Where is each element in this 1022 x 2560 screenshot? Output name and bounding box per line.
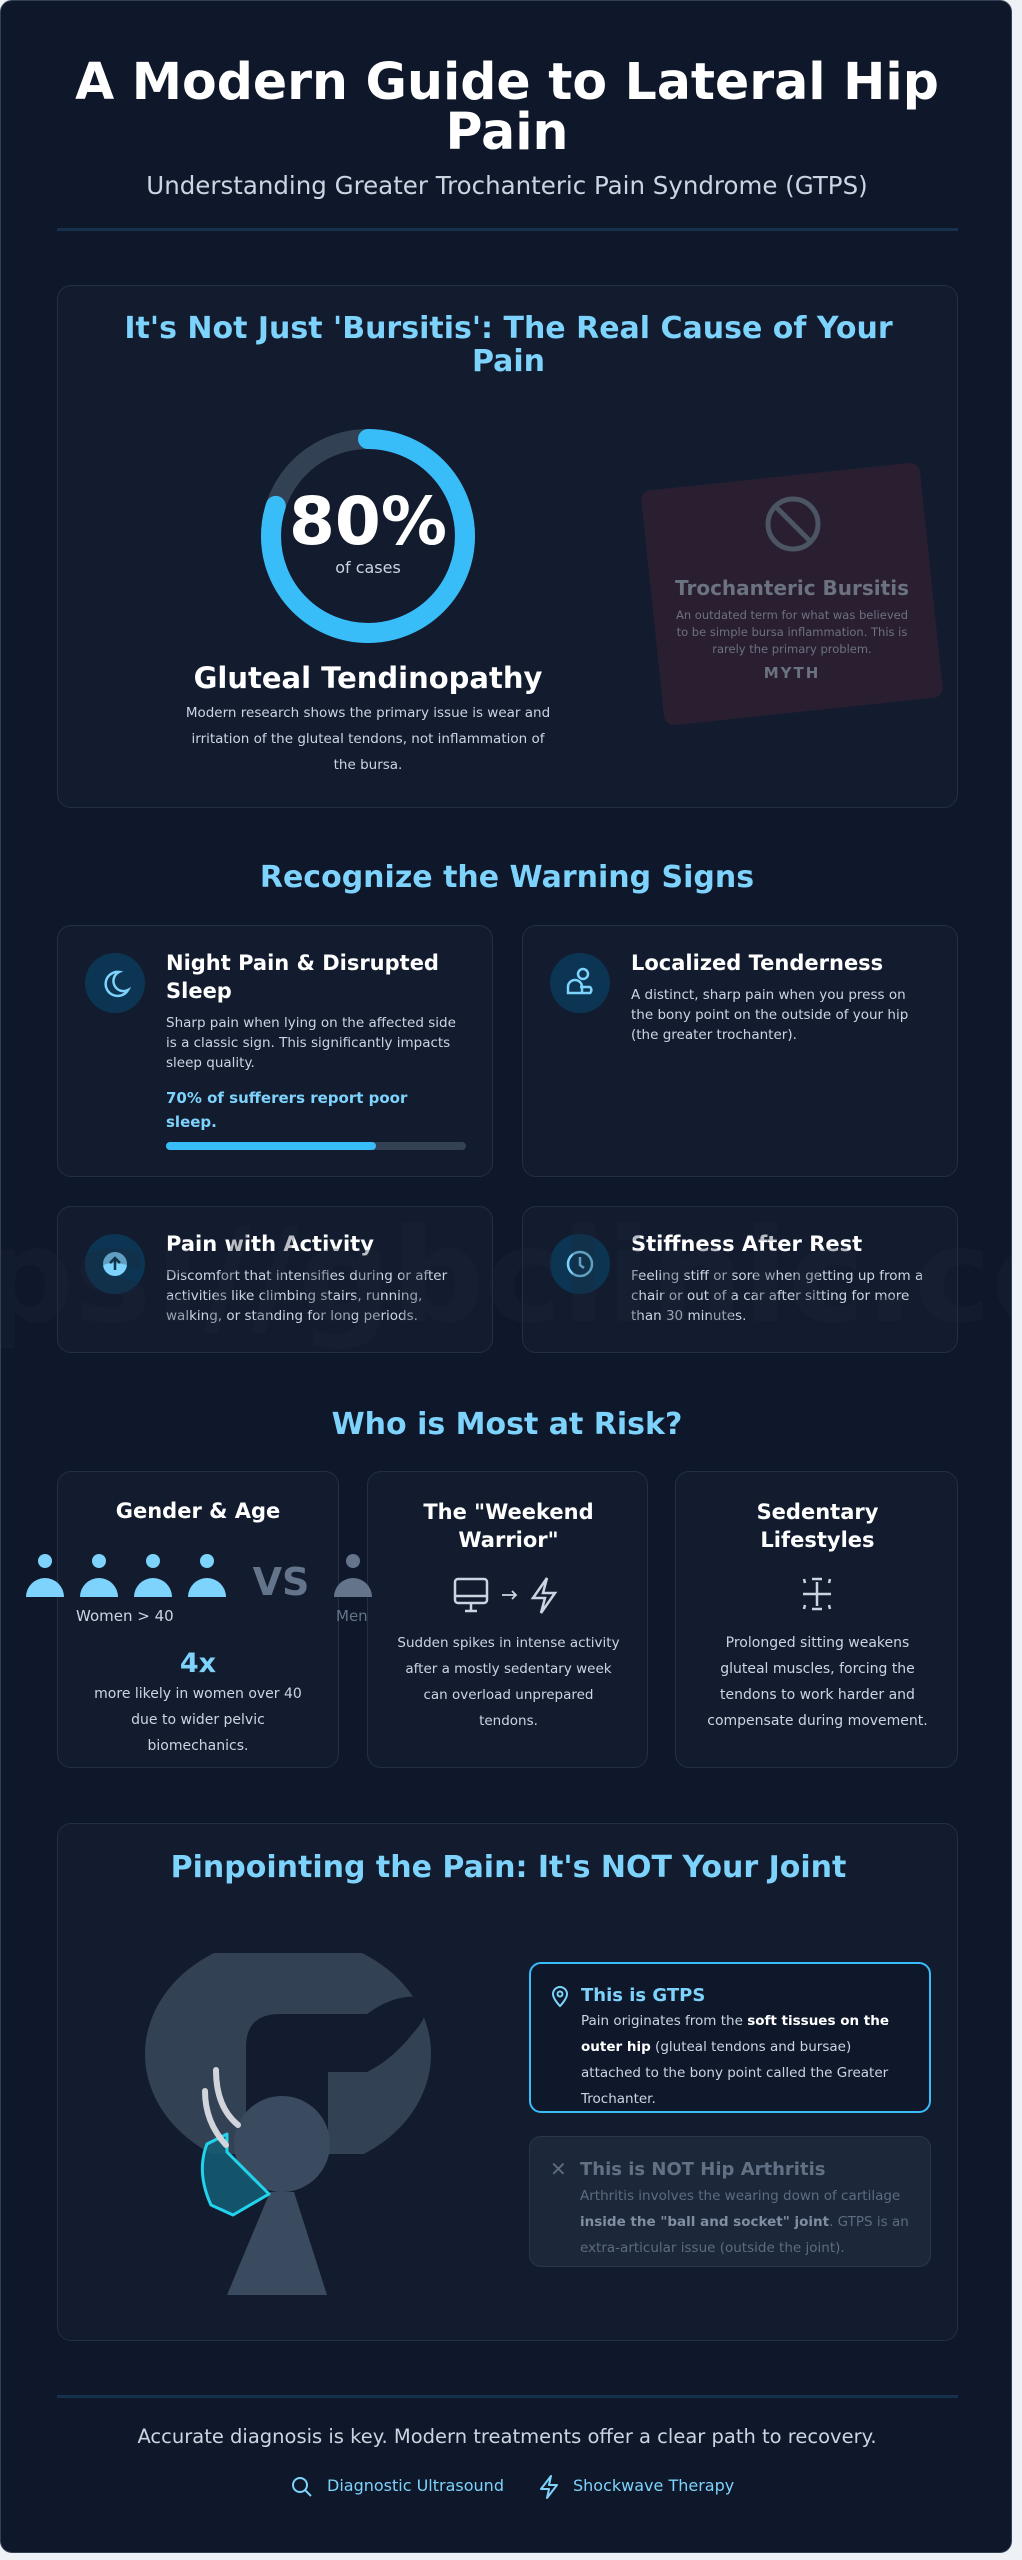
panel: activity: Pain with Activity <box>166 1232 374 1256</box>
panel: night pain <box>57 925 493 1177</box>
panel: stiffness: Stiffness After Rest <box>631 1232 862 1256</box>
callout: this is GTPS <box>529 1962 931 2113</box>
gender content: more likely in women over 40 due to wider pelvic biomechanics. <box>94 1686 302 1754</box>
donut chart 80% <box>261 429 475 643</box>
gluteal tendinopathy text: Gluteal Tendinopathy <box>194 661 542 695</box>
panel: stiffness: Feeling stiff or sore when getting up from a chair or out of a car after sitting for more than 30 minutes. <box>631 1268 923 1324</box>
panel: weekend warrior: Sudden spikes in intense activity after a mostly sedentary week can overload unprepared tendons. <box>397 1635 620 1729</box>
callout: not hip arthritis <box>529 2136 931 2267</box>
gender content: 4x <box>180 1648 216 1679</box>
heading: real cause: Pain <box>472 344 545 379</box>
panel: night pain: Night Pain & Disrupted Sleep <box>166 951 439 1003</box>
gender content: Men <box>336 1607 368 1625</box>
callout: not hip arthritis: This is NOT Hip Arthritis <box>580 2159 825 2180</box>
icon: lightning <box>540 2475 558 2499</box>
panel: activity <box>57 1206 493 1353</box>
icon: map pin <box>552 1986 568 2008</box>
stat: 70%: 70% of sufferers report poor sleep. <box>166 1089 407 1131</box>
myth card: MYTH <box>764 664 820 682</box>
hip anatomy illustration <box>145 1953 431 2295</box>
panel: weekend warrior: Warrior" <box>458 1528 559 1552</box>
footer links: Diagnostic Ultrasound <box>327 2476 504 2495</box>
gender content: Women > 40 <box>76 1607 174 1625</box>
panel: weekend warrior <box>367 1471 648 1768</box>
panel: sedentary: Sedentary <box>757 1500 878 1524</box>
myth card: Trochanteric Bursitis <box>675 576 909 600</box>
heading: risk: Who is Most at Risk? <box>332 1407 682 1442</box>
icon: women x4 <box>26 1554 372 1603</box>
icon: computer to lightning <box>454 1577 558 1614</box>
panel: activity: Discomfort that intensifies during or after activities like climbing stairs, running, walking, or standing for long periods. <box>166 1268 447 1324</box>
gluteal tendinopathy text <box>186 661 550 773</box>
myth card <box>642 463 942 725</box>
icon: x: ✕ <box>550 2157 567 2181</box>
heading: pinpointing: Pinpointing the Pain: It's NOT Your Joint <box>171 1850 846 1885</box>
panel: sedentary: Lifestyles <box>760 1528 875 1552</box>
donut chart 80%: of cases <box>335 558 401 577</box>
footer links: Shockwave Therapy <box>573 2476 734 2495</box>
heading: real cause: It's Not Just 'Bursitis': The Real Cause of Your <box>124 311 893 346</box>
icon: forbidden <box>766 496 820 552</box>
footer links <box>292 2475 734 2499</box>
icon: sitting frame <box>802 1578 832 1610</box>
callout: this is GTPS: Pain originates from the soft tissues on the outer hip (gluteal tendons and bursae) attached to the bony point called the Greater Trochanter. <box>581 2013 889 2107</box>
panel: tenderness: Localized Tenderness <box>631 951 883 975</box>
footer text: Accurate diagnosis is key. Modern treatments offer a clear path to recovery. <box>137 2425 877 2448</box>
callout: this is GTPS: This is GTPS <box>581 1985 705 2006</box>
gender content <box>26 1499 372 1754</box>
panel: night pain: Sharp pain when lying on the affected side is a classic sign. This significantly impacts sleep quality. <box>166 1015 456 1071</box>
gluteal tendinopathy text: Modern research shows the primary issue is wear and irritation of the gluteal tendons, not inflammation of the bursa. <box>186 705 550 773</box>
icon: arrow up <box>85 1234 145 1294</box>
gender content: Gender & Age <box>116 1499 280 1523</box>
title <box>75 52 939 161</box>
panel: tenderness: A distinct, sharp pain when you press on the bony point on the outside of your hip (the greater trochanter). <box>631 987 908 1043</box>
icon: person pressing <box>550 953 610 1013</box>
progress bar <box>166 1142 466 1150</box>
icon: women x4: VS <box>253 1560 309 1603</box>
panel: weekend warrior: The "Weekend <box>423 1500 594 1524</box>
title: A Modern Guide to Lateral Hip <box>75 52 939 111</box>
heading: real cause <box>124 311 893 379</box>
panel: pinpointing <box>57 1823 958 2341</box>
panel: sedentary <box>675 1471 958 1768</box>
panel: stiffness <box>522 1206 958 1353</box>
panel: sedentary: Prolonged sitting weakens gluteal muscles, forcing the tendons to work harder and compensate during movement. <box>707 1635 928 1729</box>
panel: real cause <box>57 285 958 808</box>
donut chart 80%: 80% <box>289 483 447 560</box>
heading: warning signs: Recognize the Warning Signs <box>260 860 754 895</box>
icon: search <box>292 2477 312 2497</box>
subtitle: Understanding Greater Trochanteric Pain Syndrome (GTPS) <box>146 171 868 200</box>
panel: tenderness <box>522 925 958 1177</box>
title: Pain <box>446 102 568 161</box>
icon: clock <box>550 1234 610 1294</box>
myth card: An outdated term for what was believed to be simple bursa inflammation. This is rarely the primary problem. <box>676 608 908 656</box>
icon: moon <box>85 953 145 1013</box>
panel: gender & age <box>57 1471 339 1768</box>
callout: not hip arthritis: Arthritis involves the wearing down of cartilage inside the "ball and socket" joint. GTPS is an extra-articular issue (outside the joint). <box>580 2188 909 2256</box>
